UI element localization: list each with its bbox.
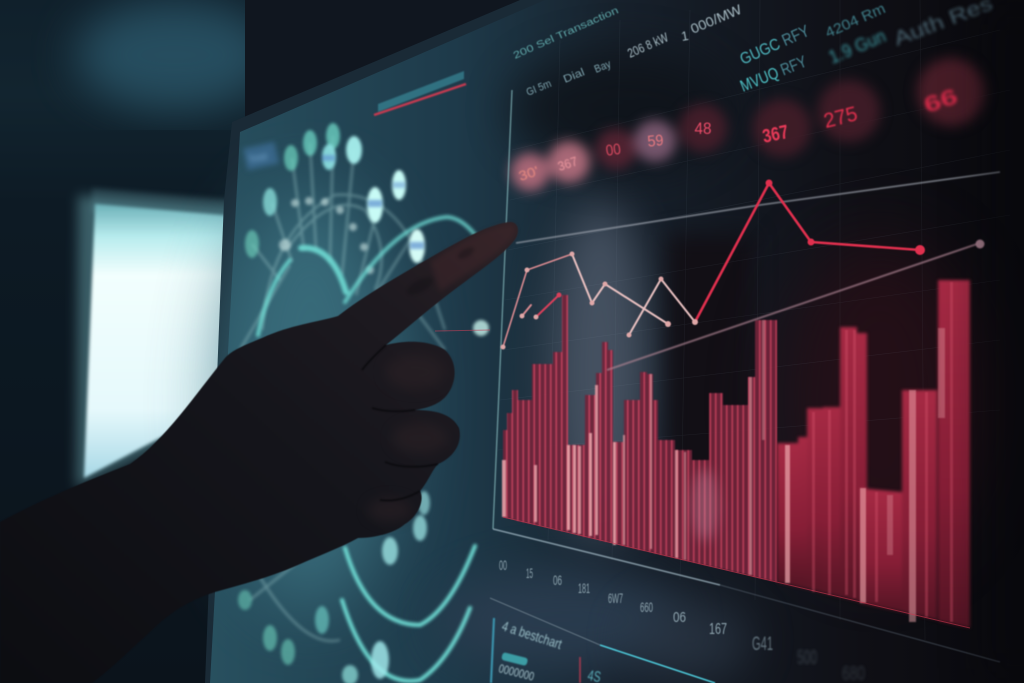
small screen header block	[243, 142, 279, 170]
x axis labels: G41	[752, 634, 773, 655]
top chart title strip	[374, 71, 466, 115]
x axis labels	[499, 557, 865, 683]
x axis labels: 660	[640, 599, 653, 615]
network diagram	[238, 123, 490, 683]
metric values: 275	[821, 102, 860, 133]
line chart	[500, 180, 925, 350]
top header text: MVUQ RFY	[737, 52, 809, 96]
metric values: 48	[694, 119, 712, 138]
metric values: 30'	[516, 163, 540, 184]
solid bars	[777, 280, 970, 628]
top header text: GI 5m	[525, 78, 553, 99]
hand silhouette	[0, 222, 518, 683]
top header text: 1	[680, 28, 690, 44]
diagram joints	[279, 197, 374, 274]
red metric circles	[511, 58, 985, 191]
teal arcs	[258, 217, 476, 681]
finger tone patches	[368, 354, 448, 522]
bottom data panel: 4 a bestchart	[500, 618, 564, 652]
diagram nodes	[238, 123, 489, 683]
x axis labels: 00	[499, 557, 507, 573]
metric values: 00	[605, 141, 622, 160]
top header text: 4204 Rm	[823, 0, 888, 42]
diagram spokes	[240, 136, 445, 641]
soft stripes on solid bars	[812, 282, 953, 622]
x axis labels: 500	[797, 647, 817, 669]
x axis labels: 06	[553, 572, 562, 588]
top header text: 1.9 Gun	[826, 26, 889, 68]
striped bars	[503, 295, 777, 582]
trend lines	[516, 172, 1000, 370]
chart baseline	[503, 517, 970, 628]
metric values: 59	[647, 132, 664, 151]
x axis labels: 167	[709, 621, 727, 638]
top header text	[512, 0, 996, 99]
right side vignette	[985, 0, 1024, 683]
x axis labels: 15	[526, 565, 533, 581]
metric values: 66	[921, 84, 961, 118]
knuckle creases	[405, 245, 476, 298]
top header text: Dial	[562, 66, 587, 86]
x axis labels: 06	[673, 609, 686, 626]
metric values: 367	[556, 153, 579, 174]
red connector	[435, 330, 490, 331]
bar chart	[502, 280, 970, 628]
metric glows	[511, 58, 985, 191]
pale highlighted bars	[502, 320, 945, 622]
finger creases	[362, 345, 438, 501]
top header text: 000/MW	[688, 1, 745, 37]
room wall background	[0, 0, 245, 416]
monitor frame	[205, 0, 1024, 683]
top header text: Bay	[593, 58, 613, 76]
metric values: 367	[761, 122, 791, 148]
x axis labels: 6W7	[608, 590, 623, 606]
top header text: 200 Sel Transaction	[512, 5, 620, 62]
chart axis frame	[490, 90, 1000, 683]
dashboard screen	[210, 0, 1024, 683]
x axis labels: 181	[578, 580, 590, 596]
bar sheen	[692, 469, 718, 541]
bottom data panel	[491, 618, 602, 683]
small screen header block: Total	[247, 151, 268, 165]
grid lines	[498, 0, 1010, 640]
top header text: GUGC RFY	[737, 21, 812, 69]
bright window	[76, 188, 240, 488]
metric values	[516, 84, 961, 184]
top header text: Auth Res	[891, 0, 996, 51]
line markers	[500, 180, 925, 350]
fingertip warm light	[430, 224, 515, 292]
top header text: 206 8 kW	[625, 29, 671, 61]
